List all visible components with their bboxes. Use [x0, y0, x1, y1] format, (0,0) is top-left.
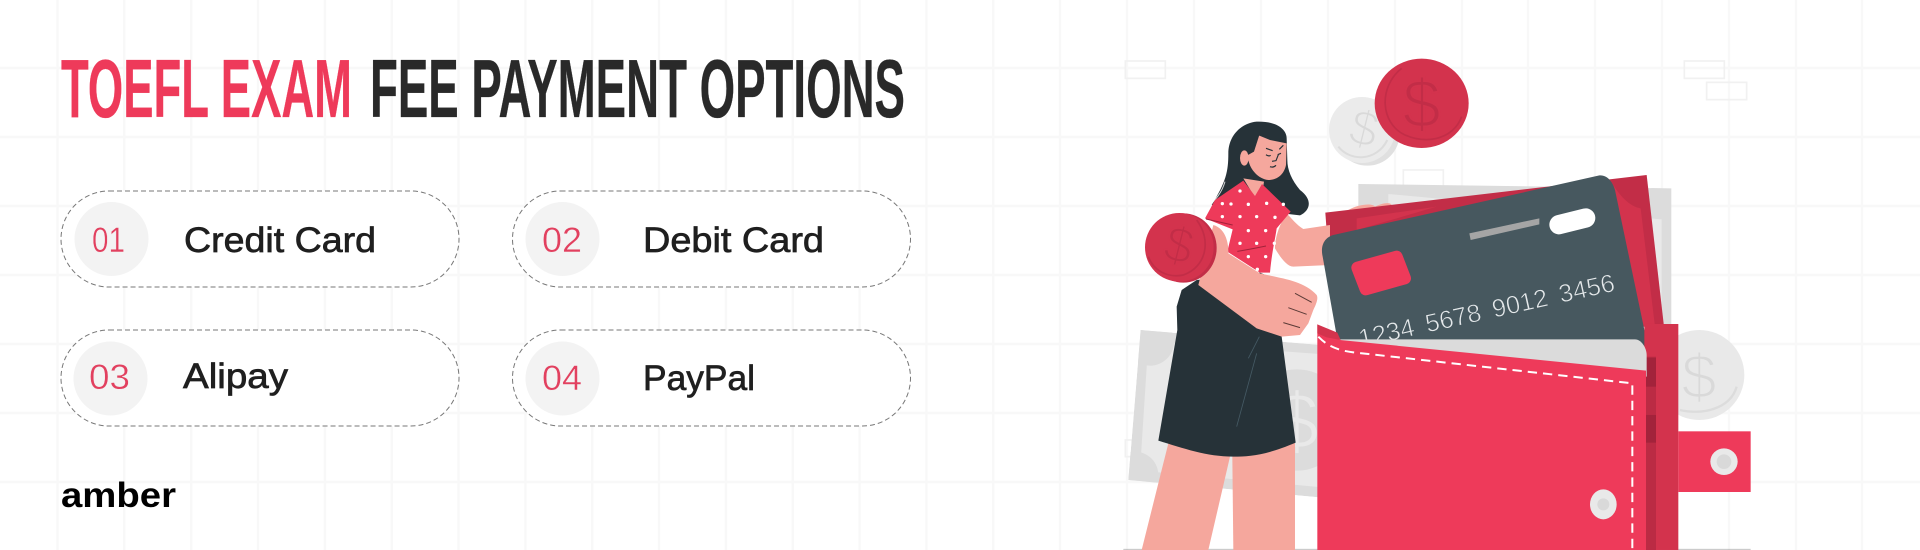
title: TOEFL EXAM	[61, 42, 352, 135]
woman head	[1240, 130, 1287, 197]
option pill: 04 PayPal: PayPal	[643, 359, 755, 398]
icon: gray coin: $	[1344, 98, 1384, 159]
woman skirt	[1158, 273, 1296, 457]
icon: gray coin right	[1654, 330, 1744, 420]
hand behind the card	[1348, 203, 1393, 217]
banknote behind woman: $	[1274, 376, 1319, 465]
option pill: 02 Debit Card: 02	[542, 221, 582, 260]
icon: red coin in hand: $	[1159, 215, 1199, 276]
icon: red coin top	[1375, 59, 1469, 148]
card number: 1234 5678 9012 3456	[1356, 269, 1617, 353]
banknote behind woman	[1128, 330, 1318, 497]
option pill: 03 Alipay: Alipay	[183, 357, 289, 396]
option pill: 03 Alipay	[61, 330, 459, 426]
option pill: 04 PayPal	[512, 330, 910, 426]
title	[61, 42, 905, 135]
option pill: 03 Alipay: 03	[89, 358, 130, 397]
title: FEE PAYMENT OPTIONS	[370, 42, 905, 135]
icon: red coin in hand	[1145, 213, 1217, 283]
woman back arm	[1275, 213, 1330, 267]
wallet back panel	[1644, 324, 1678, 550]
option pill: 02 Debit Card: Debit Card	[643, 221, 824, 260]
brand logo: amber: amber	[61, 476, 176, 515]
card magnetic stripe	[1469, 218, 1539, 240]
credit card	[1322, 175, 1650, 373]
wallet strap	[1678, 431, 1751, 492]
icon: gray coin	[1329, 97, 1400, 166]
icon: gray coin right: $	[1681, 342, 1717, 412]
woman hair	[1212, 122, 1309, 215]
option pill: 01 Credit Card: 01	[92, 221, 125, 260]
red card behind	[1325, 175, 1664, 327]
card chip	[1357, 257, 1405, 289]
woman front arm and hand	[1198, 225, 1317, 337]
card white pill	[1559, 218, 1586, 225]
option pill: 02 Debit Card	[512, 191, 910, 287]
ground line	[1123, 548, 1751, 550]
option pill: 04 PayPal: 04	[542, 359, 582, 398]
inner gray card	[1338, 339, 1647, 377]
icon: red coin top: $	[1403, 66, 1441, 142]
illustration: woman putting a card in a wallet	[1112, 59, 1751, 550]
option pill: 01 Credit Card: Credit Card	[184, 221, 376, 260]
banknote behind card	[1358, 184, 1671, 327]
wallet front pocket	[1317, 324, 1646, 550]
woman shirt	[1205, 181, 1291, 273]
background outline boxes	[1125, 61, 1747, 457]
option pill: 01 Credit Card	[61, 191, 459, 287]
woman legs	[1142, 442, 1295, 550]
